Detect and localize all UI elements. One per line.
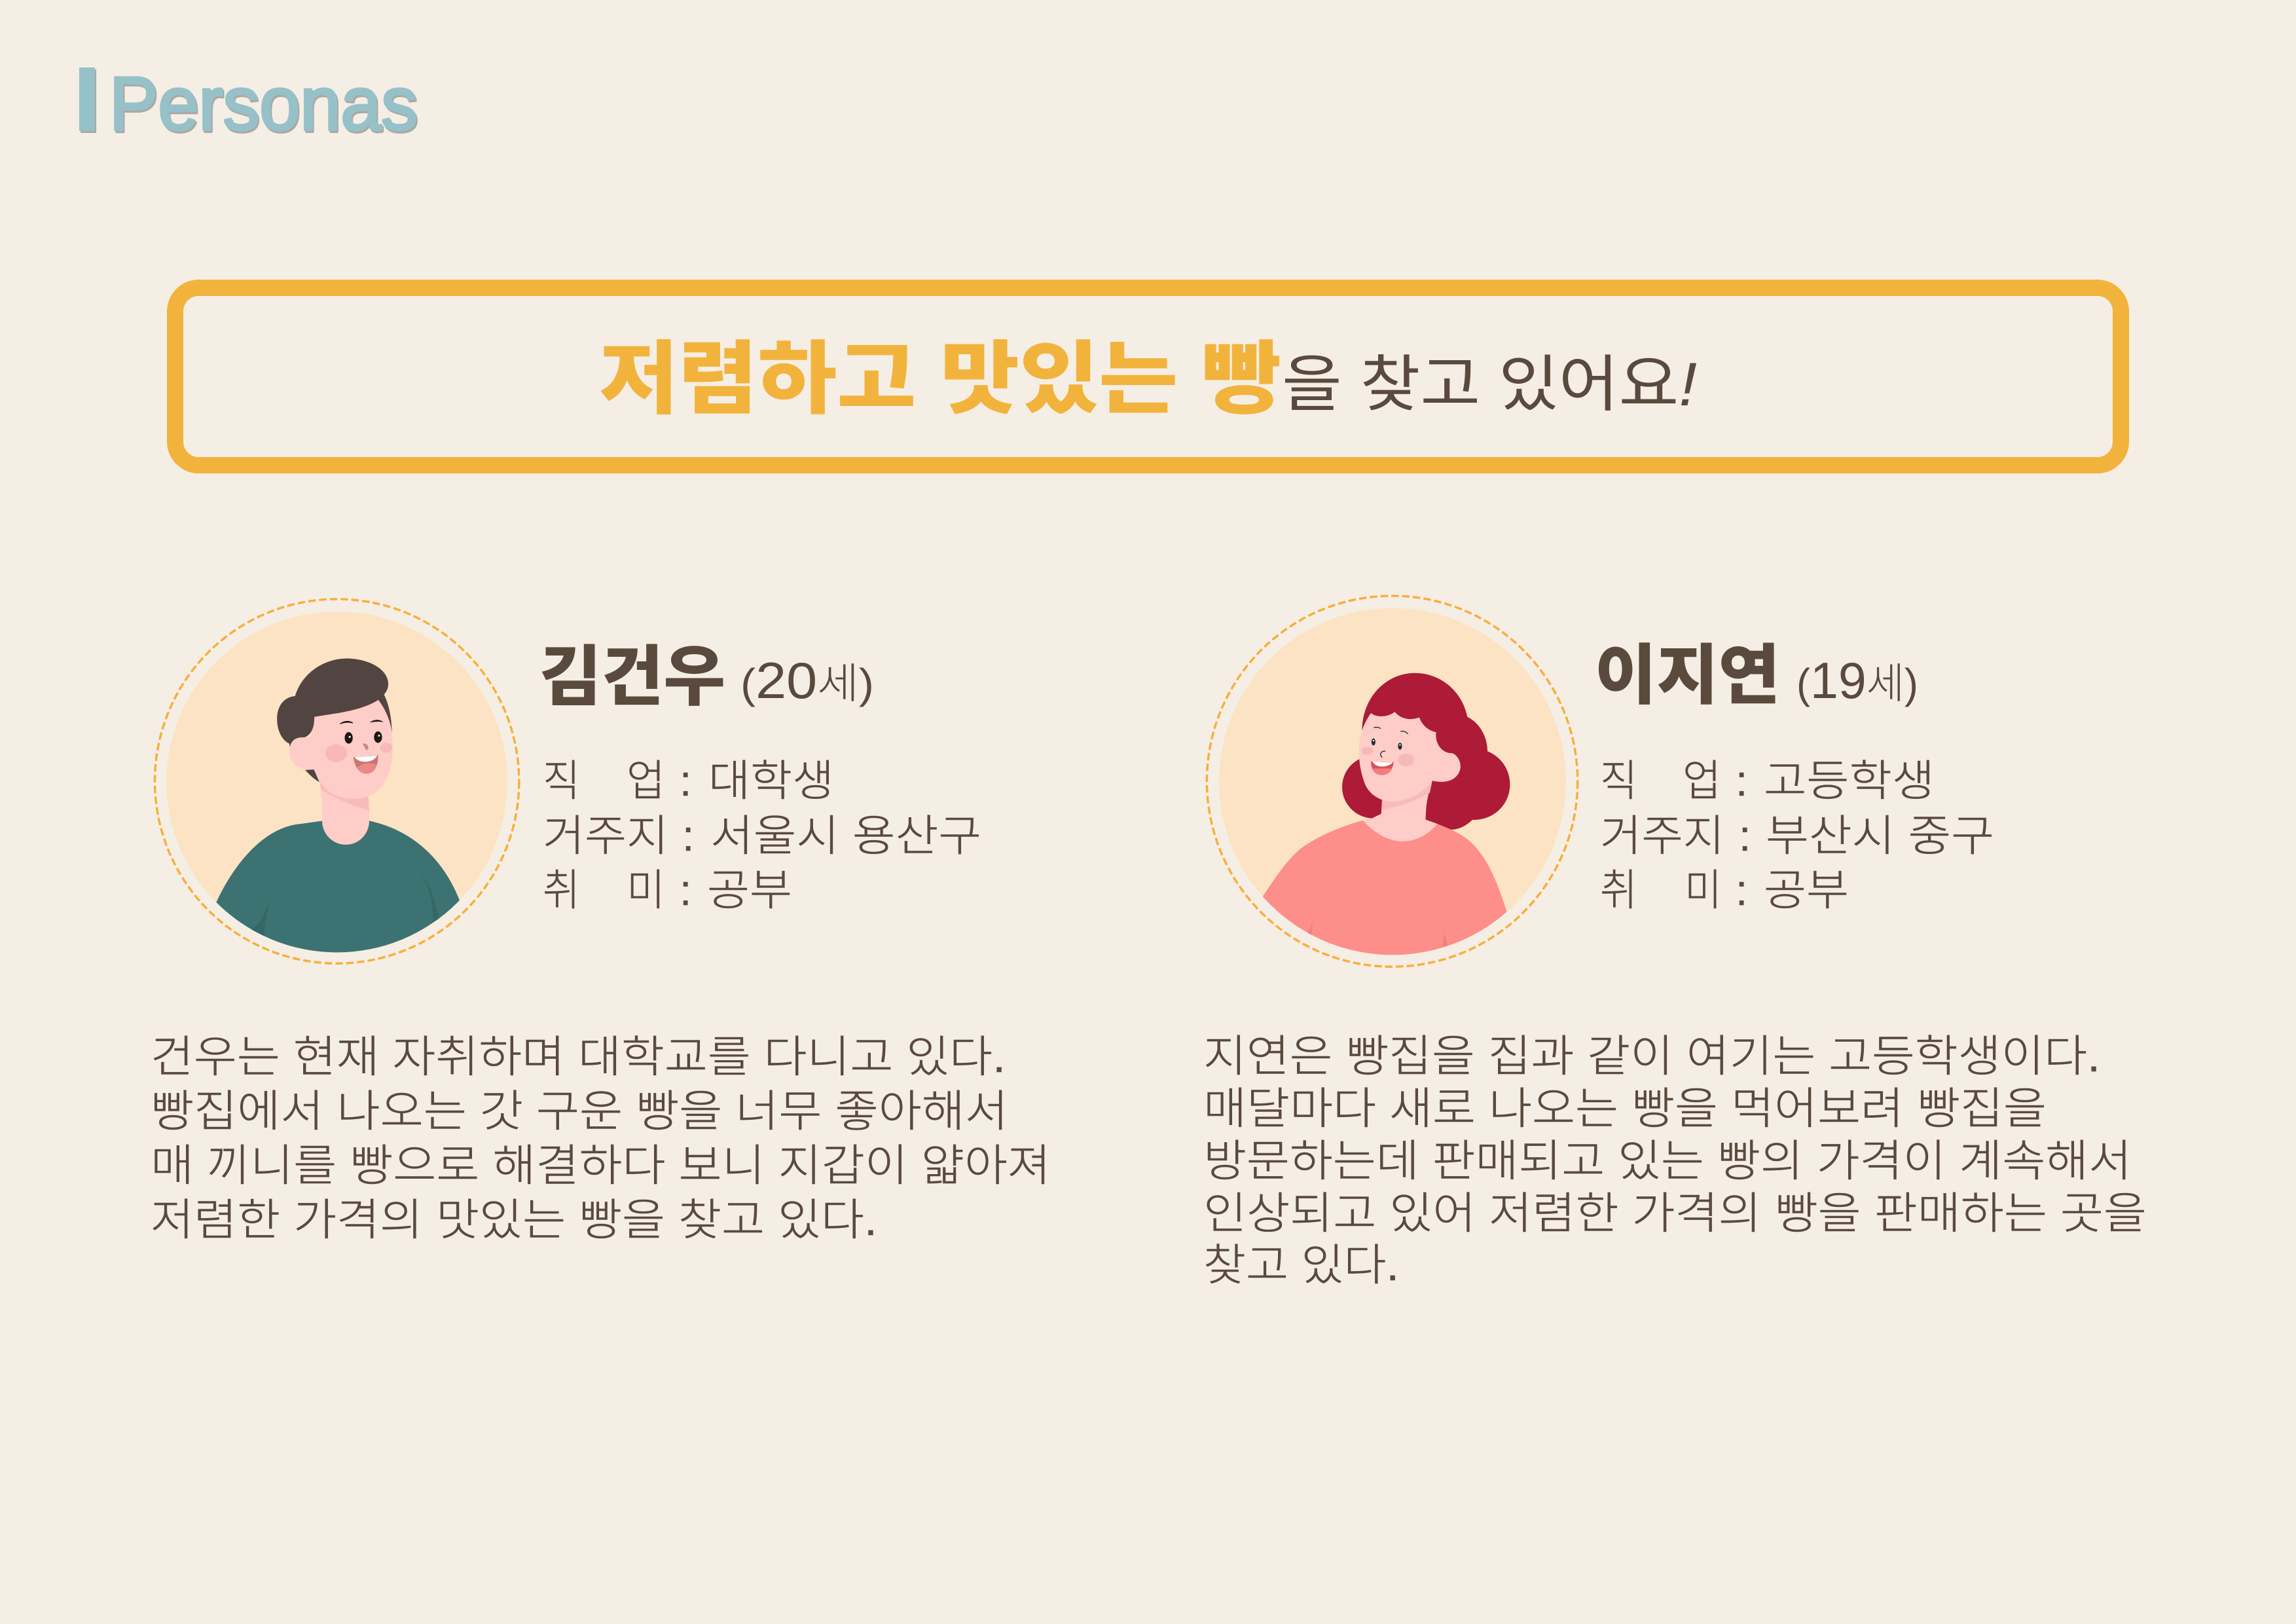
text block: 김건우 profile: : bbox=[680, 756, 691, 805]
text block: 이지연 profile: 공부 bbox=[1764, 866, 1849, 914]
text block: 이지연 profile: 업 bbox=[1683, 756, 1721, 805]
text block: 이지연 profile: 이지연 bbox=[1595, 639, 1780, 712]
text block: 이지연 profile: 미 bbox=[1685, 866, 1722, 914]
text block: 이지연 profile bbox=[1595, 639, 1994, 914]
text block: 이지연 profile: : bbox=[1736, 866, 1747, 914]
text block: 김건우 profile: 대학생 bbox=[708, 756, 834, 805]
callout: headline box bbox=[175, 288, 2121, 465]
icon: man avatar bbox=[155, 599, 519, 964]
text block: 김건우 description: 건우는 현재 자취하며 대학교를 다니고 있다. bbox=[151, 1033, 1006, 1082]
text block: 이지연 description bbox=[1203, 1032, 2147, 1290]
text block: 이지연 profile: 고등학생 bbox=[1764, 756, 1935, 805]
text block: 김건우 description: 저렴한 가격의 맛있는 빵을 찾고 있다. bbox=[151, 1196, 877, 1245]
heading: Personas: Personas bbox=[109, 61, 418, 146]
text block: 이지연 profile: 거주지 bbox=[1600, 811, 1724, 860]
text block: 김건우 profile: (20세) bbox=[740, 652, 874, 709]
text block: 김건우 description: 빵집에서 나오는 갓 구운 빵을 너무 좋아해서 bbox=[151, 1087, 1008, 1136]
text block: 이지연 description: 방문하는데 판매되고 있는 빵의 가격이 계속해서 bbox=[1203, 1137, 2132, 1186]
text block: 김건우 profile: 서울시 용산구 bbox=[710, 811, 981, 860]
text block: 이지연 profile: : bbox=[1739, 811, 1751, 860]
text block: 이지연 profile: 부산시 중구 bbox=[1766, 811, 1994, 860]
text block: 이지연 description: 찾고 있다. bbox=[1203, 1241, 1399, 1290]
callout: headline box: 저렴하고 맛있는 빵 bbox=[599, 335, 1281, 424]
text block: 김건우 profile: 업 bbox=[627, 756, 665, 805]
icon: woman avatar bbox=[1207, 596, 1578, 967]
text block: 이지연 description: 매달마다 새로 나오는 빵을 먹어보려 빵집을 bbox=[1203, 1084, 2047, 1134]
text block: 김건우 profile: : bbox=[682, 811, 694, 860]
text block: 이지연 profile: 직 bbox=[1600, 756, 1637, 805]
text block: 이지연 profile: 취 bbox=[1600, 866, 1637, 914]
text block: 김건우 profile: 직 bbox=[543, 756, 580, 805]
text block: 김건우 profile: : bbox=[680, 866, 691, 914]
text block: 이지연 description: 인상되고 있어 저렴한 가격의 빵을 판매하는 곳을 bbox=[1203, 1189, 2147, 1238]
text block: 김건우 description bbox=[151, 1033, 1051, 1245]
text block: 김건우 profile bbox=[539, 640, 981, 914]
text block: 김건우 description: 매 끼니를 빵으로 해결하다 보니 지갑이 얇아져 bbox=[151, 1141, 1051, 1190]
text block: 김건우 profile: 공부 bbox=[707, 866, 792, 914]
text block: 김건우 profile: 미 bbox=[627, 866, 665, 914]
text block: 이지연 description: 지연은 빵집을 집과 같이 여기는 고등학생이다. bbox=[1203, 1032, 2100, 1081]
text block: 이지연 profile: (19세) bbox=[1796, 652, 1918, 709]
callout: headline box: 을 찾고 있어 요! bbox=[1282, 350, 1697, 418]
text block: 김건우 profile: 거주지 bbox=[543, 811, 668, 860]
text block: 김건우 profile: 김건우 bbox=[539, 640, 725, 714]
text block: 이지연 profile: : bbox=[1736, 756, 1747, 805]
text block: 김건우 profile: 취 bbox=[543, 866, 580, 914]
